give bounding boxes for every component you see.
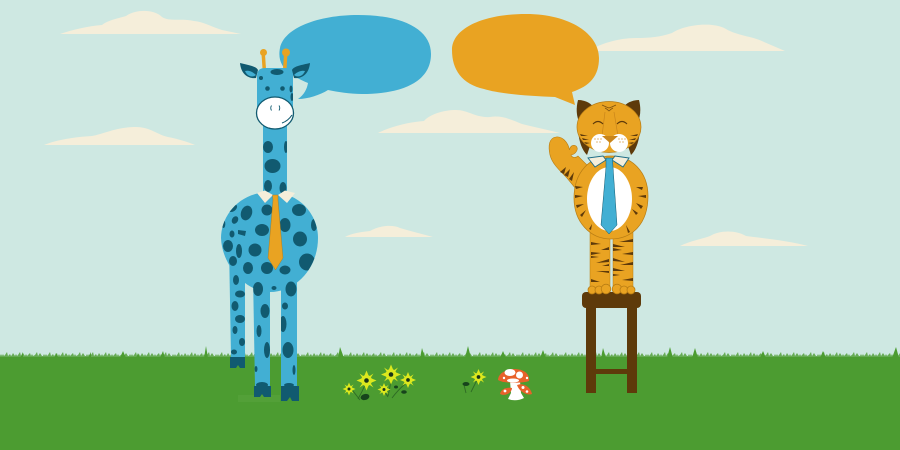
clouds xyxy=(44,11,808,246)
small caps xyxy=(500,388,512,395)
muzzle xyxy=(256,97,294,129)
muzzle cheeks xyxy=(591,134,609,152)
collar xyxy=(588,156,629,167)
body xyxy=(574,156,648,239)
cloud 3 xyxy=(378,110,560,133)
nose xyxy=(602,136,618,143)
horns xyxy=(260,48,290,69)
back leg xyxy=(229,245,245,357)
necktie xyxy=(601,158,617,234)
main cap xyxy=(498,369,529,383)
ears xyxy=(240,63,258,78)
whisker dots xyxy=(594,138,626,143)
stems xyxy=(353,380,477,400)
body stripes xyxy=(575,186,646,233)
cloud 6 xyxy=(680,232,808,246)
cloud 2 xyxy=(588,25,785,51)
grass xyxy=(0,346,900,450)
flower heads xyxy=(342,382,356,396)
speech bubble: orange xyxy=(452,14,599,105)
arm xyxy=(549,137,592,194)
leaves xyxy=(360,382,470,401)
mushrooms xyxy=(498,369,532,400)
cheek fur xyxy=(578,130,598,155)
stems xyxy=(508,381,524,400)
eyes xyxy=(593,122,627,124)
speech bubble: blue xyxy=(279,15,431,99)
nose bridge xyxy=(602,112,618,136)
front right leg xyxy=(281,280,297,387)
cap spots xyxy=(503,369,528,382)
collar xyxy=(257,190,295,203)
tiger on stool xyxy=(549,100,648,393)
stool xyxy=(582,292,641,393)
front hooves xyxy=(254,386,271,397)
legs xyxy=(590,232,633,290)
forehead marks xyxy=(602,105,616,111)
back hoof xyxy=(230,357,245,368)
giraffe xyxy=(221,48,318,401)
cloud 1 xyxy=(60,11,241,34)
necktie xyxy=(268,195,283,270)
face stripes xyxy=(580,134,638,144)
front left leg xyxy=(253,275,270,387)
body xyxy=(221,192,318,292)
arm stripes xyxy=(560,167,574,181)
belly xyxy=(587,167,632,231)
leg stripes xyxy=(591,239,633,282)
face details xyxy=(271,106,292,123)
ears xyxy=(577,100,594,124)
toes xyxy=(588,284,635,294)
flowers xyxy=(342,364,486,401)
watermark smudge xyxy=(238,395,280,402)
neck xyxy=(263,90,287,198)
spots xyxy=(222,69,317,388)
cloud 4 xyxy=(44,127,195,145)
head xyxy=(577,102,641,152)
cloud 5 xyxy=(345,226,433,237)
head xyxy=(257,68,293,112)
